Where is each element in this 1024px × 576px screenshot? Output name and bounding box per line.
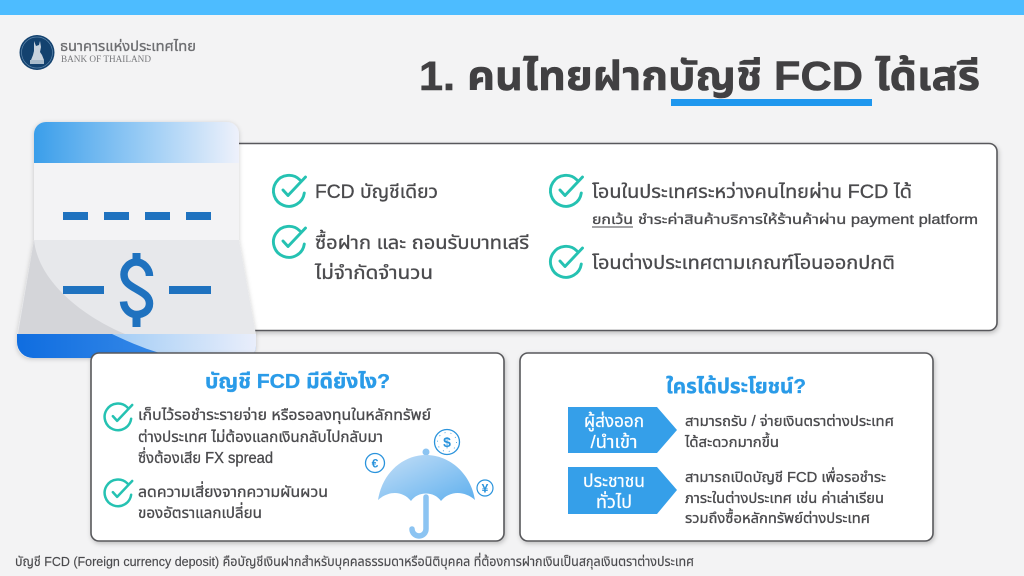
text: exporters benefit [684,413,894,451]
panel: FCD features [225,144,997,330]
check item: free deposit and withdrawal [273,226,529,284]
text: public benefit: ภาระในต่างประเทศ เช่น ค่าเล่าเรียน [685,490,884,507]
icon: dollar coin: $ [443,434,451,450]
bank name English: BANK OF THAILAND [61,54,152,64]
text: public benefit: รวมถึงซื้อหลักทรัพย์ต่างประเทศ [685,508,870,527]
check item: overseas transfer: โอนต่างประเทศตามเกณฑ์โอนออกปกติ [592,251,895,274]
top colour band [0,0,1024,15]
benefit: hold for payments: เก็บไว้รอชำระรายจ่าย หรือรอลงทุนในหลักทรัพย์ [138,406,431,424]
check item: single FCD account [273,175,438,206]
check item: single FCD account: FCD บัญชีเดียว [315,182,438,203]
text: exporters benefit: สามารถรับ / จ่ายเงินตราต่างประเทศ [685,413,894,430]
tag: general public: ทั่วไป [596,491,632,512]
icon: yen coin [477,480,493,496]
icon: dollar coin [434,430,460,454]
heading: ใครได้ประโยชน์? [666,375,806,398]
icon: umbrella [378,448,475,536]
tag: general public: ประชาชน [583,471,645,491]
logo: Bank of Thailand [20,35,196,70]
benefit: hold for payments: ต่างประเทศ ไม่ต้องแลกเงินกลับไปกลับมา [138,428,383,446]
check item: domestic transfer [550,175,978,228]
bank name Thai: ธนาคารแห่งประเทศไทย [60,38,196,54]
text: public benefit: สามารถเปิดบัญชี FCD เพื่อรอชำระ [685,467,886,486]
check item: free deposit and withdrawal: ไม่จำกัดจำนวน [314,261,433,284]
footnote: บัญชี FCD (Foreign currency deposit) คือบัญชีเงินฝากสำหรับบุคคลธรรมดาหรือนิติบุคคล ที่ต้องการฝากเงินเป็นสกุลเงินตราต่างประเทศ [15,552,694,569]
tag: exporters importers [568,407,677,453]
benefit: reduce FX risk: ของอัตราแลกเปลี่ยน [138,502,262,522]
benefit: hold for payments [105,404,431,467]
check item: overseas transfer [550,246,895,277]
panel: FCD benefits [91,353,504,541]
icon: passbook with dollar sign [17,122,256,358]
check item: domestic transfer: โอนในประเทศระหว่างคนไทยผ่าน FCD ได้ [592,180,912,203]
icon: bank seal [20,35,54,70]
text: public benefit [685,467,886,527]
tag: exporters importers: /นำเข้า [590,432,638,452]
check item: domestic transfer: ชำระค่าสินค้าบริการให้ร้านค้าผ่าน payment platform [638,211,978,227]
text: exporters benefit: ได้สะดวกมากขึ้น [684,432,779,451]
title: 1. คนไทยฝากบัญชี FCD ได้เสรี [419,53,980,99]
panel: who benefits [520,353,933,541]
benefit: reduce FX risk: ลดความเสี่ยงจากความผันผวน [138,481,328,501]
tag: exporters importers: ผู้ส่งออก [584,411,644,433]
tag: general public [568,467,677,514]
benefit: hold for payments: ซึ่งต้องเสีย FX spread [138,447,273,467]
check item: domestic transfer: ยกเว้น [592,212,633,227]
benefit: reduce FX risk [105,480,328,522]
icon: yen coin: ¥ [482,482,489,496]
icon: euro coin: € [372,456,379,470]
heading: บัญชี FCD มีดียังไง? [205,370,390,393]
icon: euro coin [366,454,384,472]
check item: free deposit and withdrawal: ซื้อฝาก และ ถอนรับบาทเสรี [315,229,529,254]
